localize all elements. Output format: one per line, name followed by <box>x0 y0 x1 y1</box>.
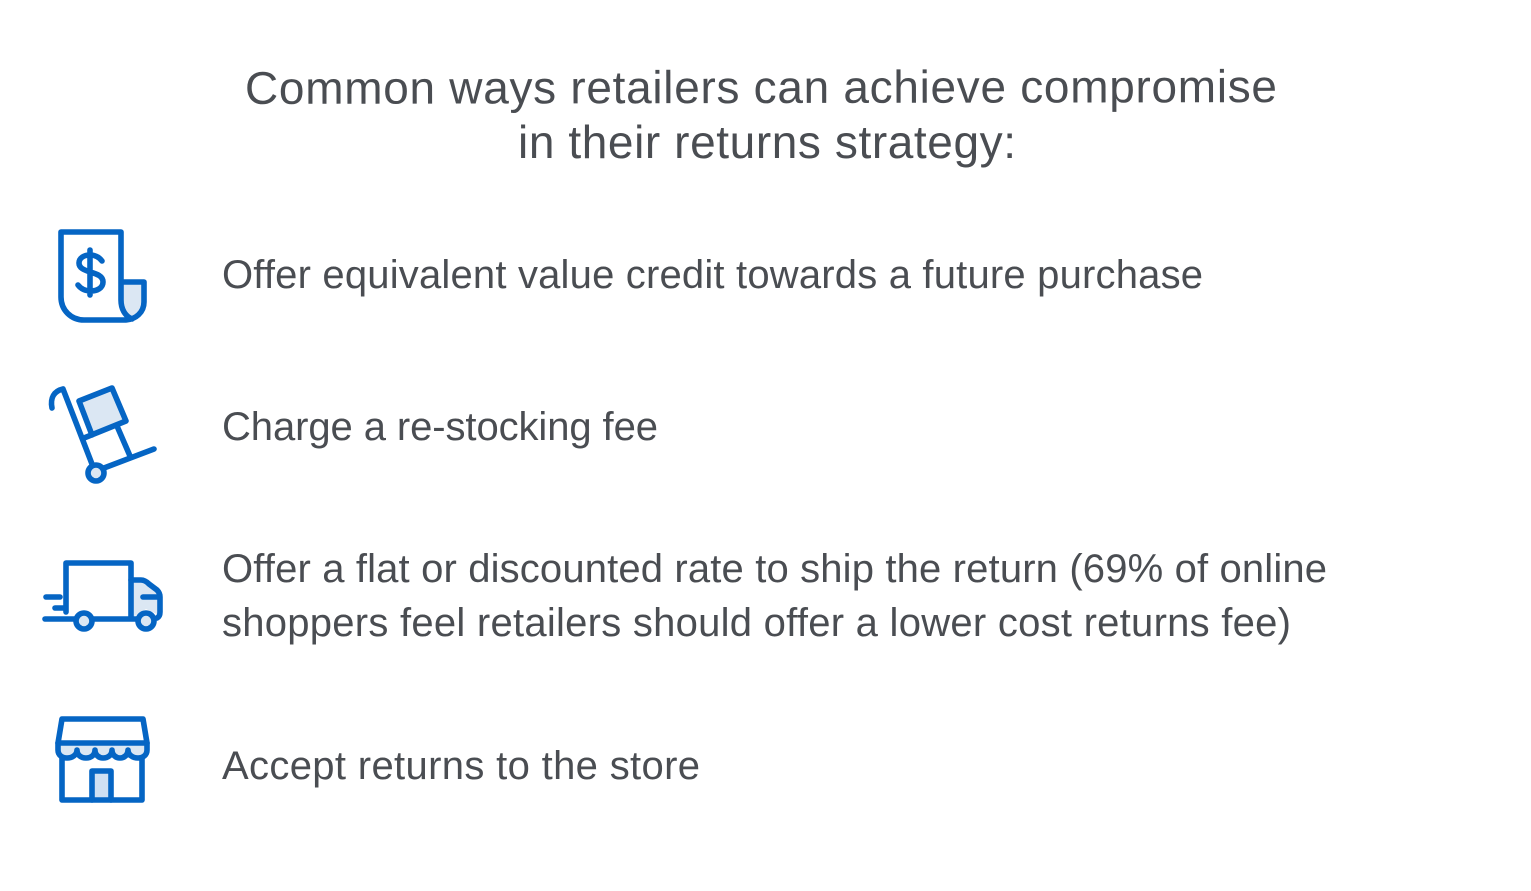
text: flat or discounted rate option: shoppers feel retailers should offer a lower cost returns fee) <box>222 601 1291 645</box>
icon: receipt with dollar sign <box>61 232 144 320</box>
title: Common ways retailers can achieve compromise <box>245 60 1277 114</box>
icon: delivery truck <box>45 563 160 629</box>
icon: hand truck with box <box>51 388 154 481</box>
text: credit option: Offer equivalent value credit towards a future purchase <box>222 253 1203 297</box>
title <box>245 60 1277 168</box>
text: re-stocking fee option: Charge a re-stocking fee <box>222 405 658 449</box>
text: accept returns option: Accept returns to the store <box>222 744 700 788</box>
text: flat or discounted rate option <box>222 547 1327 645</box>
icon: storefront <box>58 719 147 800</box>
title: in their returns strategy: <box>518 116 1016 168</box>
text: flat or discounted rate option: Offer a flat or discounted rate to ship the return (69% of online <box>222 547 1327 591</box>
